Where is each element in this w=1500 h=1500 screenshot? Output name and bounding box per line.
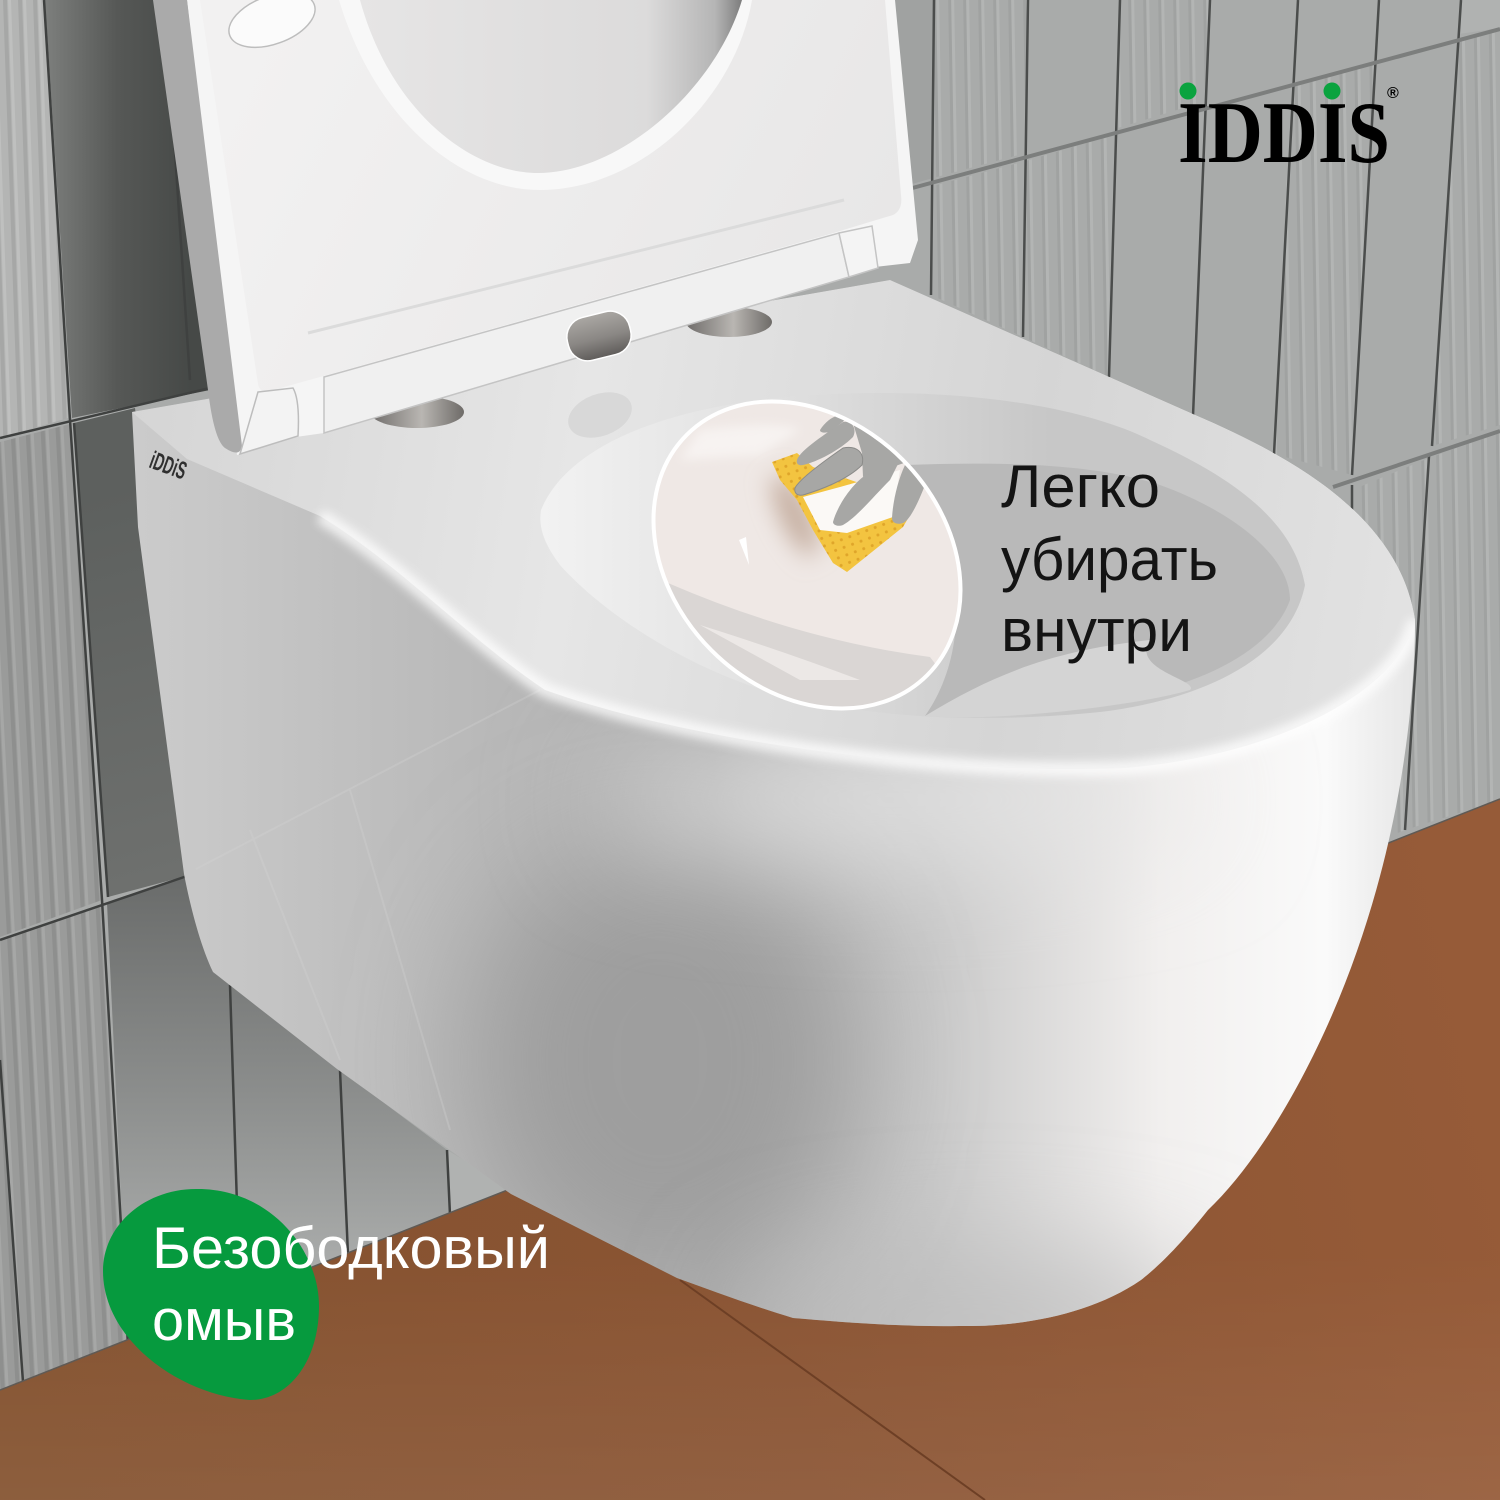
iddis logo: IDDIS — [1178, 85, 1390, 182]
brown floor — [0, 799, 1500, 1500]
lid grey side band — [153, 0, 242, 453]
bowl water ribbons — [925, 640, 1191, 717]
bowl inner shadow — [905, 464, 1290, 716]
lid hinge bar — [324, 233, 849, 433]
lid inner panel — [200, 0, 901, 392]
iddis logo: ® — [1387, 85, 1399, 102]
right hinge — [839, 226, 878, 277]
toilet lid, opened — [153, 0, 918, 455]
left hinge — [240, 388, 298, 454]
bowl body — [132, 280, 1415, 1326]
sponge foam — [803, 470, 900, 533]
green badge: rimless flush — [103, 1189, 550, 1400]
icon: yellow sponge — [772, 453, 917, 572]
callout text: easy to clean inside: Легко — [1001, 453, 1160, 520]
wall tiles: right columns — [895, 0, 1500, 838]
upper surface of the rim — [132, 280, 1415, 769]
lid opening — [360, 0, 742, 173]
callout text: easy to clean inside: внутри — [1001, 597, 1192, 664]
wall tiles: left columns — [0, 0, 515, 1392]
green badge: rimless flush: Безободковый — [152, 1216, 550, 1281]
chrome hinge bolts — [370, 307, 772, 428]
lid bumper — [222, 0, 322, 58]
lid recess line — [308, 200, 844, 333]
callout text: easy to clean inside: убирать — [1001, 526, 1218, 593]
lid opening rim — [339, 0, 752, 190]
toilet bowl — [132, 280, 1415, 1375]
green badge: rimless flush: омыв — [152, 1288, 296, 1353]
callout text: easy to clean inside — [1001, 453, 1218, 664]
bowl opening — [540, 393, 1305, 718]
icon: grey gloved hand — [795, 416, 925, 526]
small logo on the bowl: iDDiS — [146, 446, 190, 485]
magnified detail: sponge cleaning bowl — [652, 400, 962, 710]
reflection of button — [562, 384, 638, 446]
chrome button — [563, 307, 635, 365]
body shading — [132, 280, 1415, 1375]
